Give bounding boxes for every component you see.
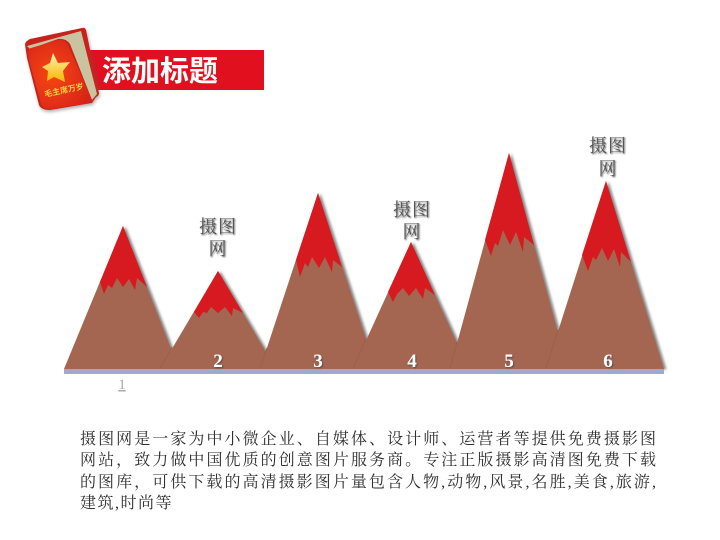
mountain 6 [546,181,664,369]
peak labels: 摄图 [393,200,431,220]
number labels [213,351,613,372]
number labels: 3 [313,351,323,372]
mountain 4 [353,242,469,369]
number labels: 2 [213,351,223,372]
number labels: 4 [407,351,417,372]
mountain 3 [260,193,376,369]
peak labels: 网 [402,222,422,242]
mountain 2 [160,271,276,369]
mountain chart [64,153,664,374]
body text: 摄图网是一家为中小微企业、自媒体、设计师、运营者等提供免费摄影图 [80,431,656,448]
peak labels: 网 [208,239,228,259]
title: 添加标题 [102,55,218,88]
peak labels: 摄图 [199,217,237,237]
body text: 网站，致力做中国优质的创意图片服务商。专注正版摄影高清图免费下载 [80,452,656,469]
mountain 5 [450,153,568,369]
mountain 1 [64,226,179,369]
icon: star [42,53,70,82]
body text: 建筑,时尚等 [80,495,173,512]
baseline [64,369,664,374]
number labels: 6 [603,351,613,372]
title bar [88,50,264,90]
number labels: 5 [504,351,514,372]
number label 1: 1 [118,377,126,393]
body text [80,430,656,512]
peak labels: 摄图 [589,136,627,156]
book label: 毛主席万岁 [43,81,85,99]
body text: 的图库，可供下载的高清摄影图片量包含人物,动物,风景,名胜,美食,旅游, [80,474,656,491]
peak labels: 网 [598,159,618,179]
peak labels [199,136,627,259]
icon: red book [25,28,99,110]
